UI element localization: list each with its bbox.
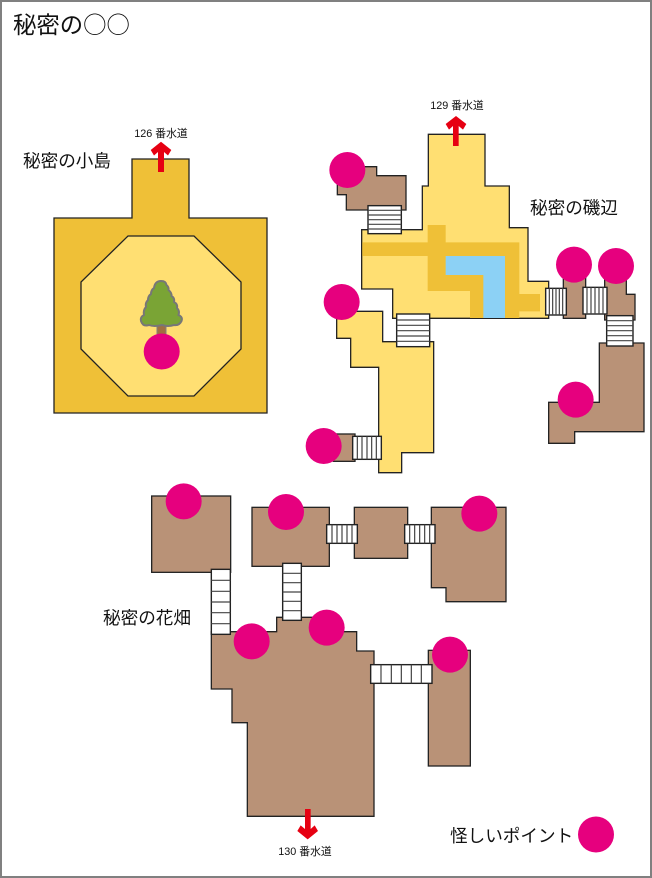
legend text: 怪しいポイント: [450, 826, 573, 846]
point markers: [166, 483, 497, 673]
garden room C: [354, 507, 408, 558]
route 129 label: 129 番水道: [430, 98, 484, 112]
stairs 3: [327, 525, 357, 543]
stairs right 1: [546, 288, 566, 315]
stairs right 3: [607, 316, 633, 346]
stairs 2: [283, 563, 301, 620]
brown lower-right ledge: [549, 343, 644, 443]
icon: tree: [141, 281, 182, 342]
arrow: to route 126: [151, 142, 171, 172]
panel: secret island: [23, 126, 267, 413]
stairs middle: [397, 314, 430, 347]
panel: secret shore: [306, 116, 644, 473]
stairs right 2: [583, 287, 607, 314]
stairs 4: [405, 525, 435, 543]
brown ledge top-left: [337, 167, 406, 210]
secret shore label: 秘密の磯辺: [530, 198, 618, 218]
point marker: [144, 334, 180, 370]
garden room B: [252, 507, 329, 566]
lower-left yellow area: [337, 311, 434, 473]
main yellow area: [362, 134, 549, 318]
route 126 label: 126 番水道: [134, 126, 188, 140]
garden main area: [211, 617, 374, 816]
garden room A: [152, 496, 231, 572]
route 130 label: 130 番水道: [278, 844, 332, 858]
stairs 5: [371, 665, 432, 683]
garden room D: [431, 507, 506, 602]
title: 秘密の○○: [13, 6, 130, 40]
brown column 1: [563, 277, 586, 318]
panel: secret flower garden: [152, 483, 506, 839]
stairs bottom-left: [353, 436, 381, 459]
arrow: to route 130: [297, 809, 318, 839]
stairs top-left: [368, 206, 401, 234]
secret island label: 秘密の小島: [23, 151, 111, 171]
legend marker: [578, 816, 614, 852]
island octagon: [81, 236, 241, 396]
stairs 1: [211, 569, 230, 634]
water: [446, 256, 505, 318]
arrow: to route 129: [446, 116, 466, 146]
island outer ground: [54, 159, 267, 413]
darker path: [362, 225, 540, 318]
brown ledge bottom-left: [333, 434, 355, 461]
secret garden label: 秘密の花畑: [103, 608, 191, 628]
point markers: [306, 152, 634, 464]
brown column 2: [605, 277, 635, 320]
legend: [450, 816, 614, 852]
garden room E: [428, 650, 470, 766]
